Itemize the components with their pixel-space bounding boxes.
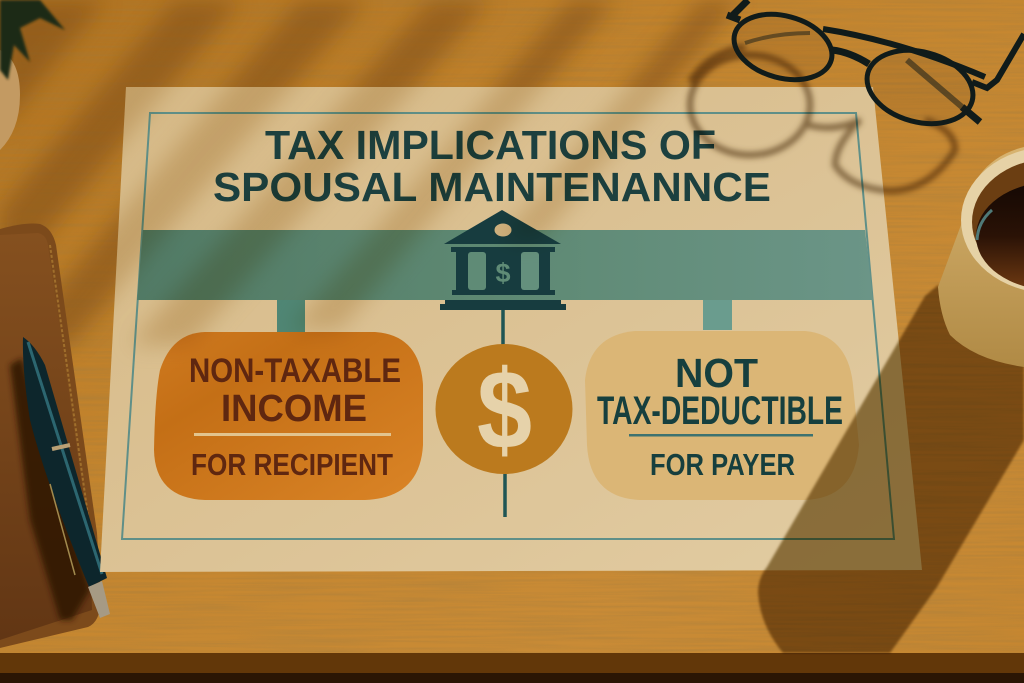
title: TAX IMPLICATIONS OF bbox=[265, 122, 716, 168]
panel: non-taxable income: INCOME bbox=[221, 388, 367, 430]
title bbox=[213, 122, 771, 210]
panel: non-taxable income bbox=[154, 332, 423, 500]
panel: not tax-deductible: FOR PAYER bbox=[650, 447, 795, 482]
desk front edge bbox=[0, 653, 1024, 683]
panel: not tax-deductible: TAX-DEDUCTIBLE bbox=[597, 389, 843, 433]
glasses bbox=[727, 0, 1024, 135]
notebook and pen bbox=[0, 224, 110, 648]
plant in corner bbox=[0, 0, 65, 150]
glasses shadow bbox=[690, 47, 955, 191]
center vertical line bbox=[503, 305, 505, 517]
mug shadow across paper and desk bbox=[758, 285, 1024, 653]
window shadows on paper bbox=[114, 87, 677, 352]
panel: not tax-deductible bbox=[585, 331, 859, 500]
icon: dollar coin bbox=[436, 344, 572, 474]
title: SPOUSAL MAINTENANNCE bbox=[213, 164, 771, 210]
panel: non-taxable income: NON-TAXABLE bbox=[189, 352, 401, 390]
icon: dollar coin: $ bbox=[477, 347, 532, 472]
connector right bbox=[703, 300, 732, 330]
coffee mug bbox=[938, 147, 1024, 367]
panel band overlay bbox=[137, 230, 873, 300]
panel: non-taxable income: FOR RECIPIENT bbox=[191, 447, 393, 482]
icon: bank building bbox=[440, 210, 566, 310]
icon: bank building: $ bbox=[495, 258, 511, 288]
infographic paper bbox=[100, 87, 922, 572]
connector left bbox=[277, 300, 305, 332]
diagonal window shadows on desk bbox=[0, 0, 740, 345]
frame border bbox=[122, 113, 894, 539]
panel: not tax-deductible: NOT bbox=[675, 350, 758, 396]
